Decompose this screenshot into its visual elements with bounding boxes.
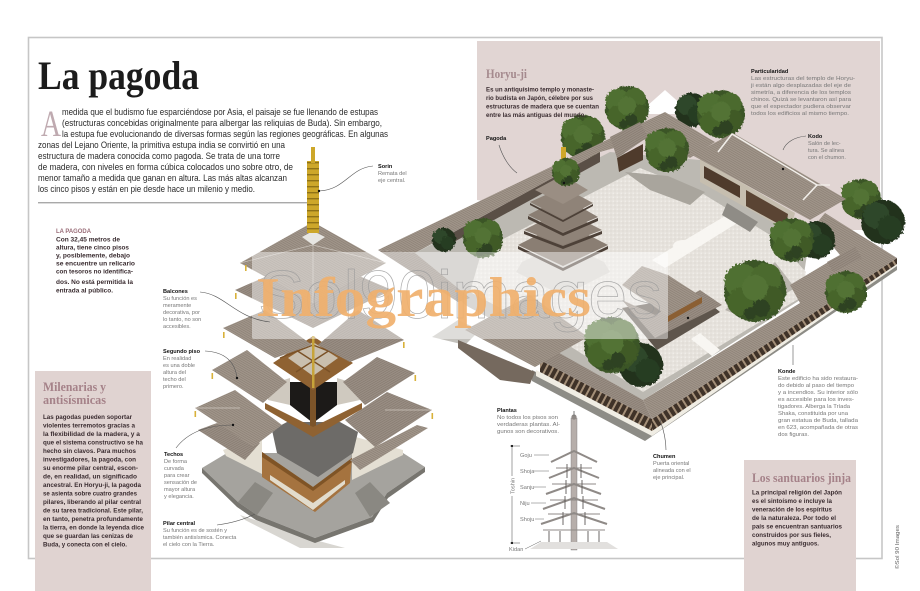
label: Segundo piso: techo del (163, 377, 186, 383)
label: Particularidad: simetría, a diferencia de los templos (751, 90, 851, 96)
text block: La pagoda: Con 32,45 metros de (56, 236, 121, 244)
label: Segundo piso: altura del (163, 370, 186, 376)
label: Konde: tigadores. Alberga la Tríada (778, 404, 851, 410)
text block: La pagoda: LA PAGODA (56, 229, 92, 235)
diagram: pagoda floors elevation (507, 411, 618, 553)
label: Balcones: lo tanto, no son (163, 317, 201, 323)
label: Kodo: Kodo (808, 134, 823, 140)
label: Pagoda (486, 136, 565, 184)
label: Particularidad: ji están algo desplazadas del eje de (750, 83, 851, 89)
panel: Milenarias y antisísmicas: Buda, y conecta con el cielo. (43, 542, 127, 548)
intro text block: (estructuras concebidas originalmente para albergar las reliquias de Buda). Sin embargo, (62, 118, 382, 128)
diagram: pagoda floors elevation: Shoja (520, 469, 535, 475)
panel: Los santuarios jinja: algunos muy antiguos. (752, 540, 819, 548)
panel: Los santuarios jinja: construidos por sus fieles, (752, 532, 831, 539)
label: Techos: curvada (164, 466, 185, 472)
label: Balcones: accesibles. (163, 324, 191, 330)
label: Balcones: decorativa, por (163, 310, 200, 316)
panel: Milenarias y antisísmicas: de, en realidad, un significado (43, 474, 137, 480)
panel: Milenarias y antisísmicas: investigadores, la pagoda, con (43, 456, 136, 464)
panel: Los santuarios jinja (744, 460, 856, 591)
label: Sorin: Remata del (378, 171, 407, 177)
watermark: Infographics (256, 267, 591, 329)
text block: La pagoda: con tesoros no identifica- (56, 268, 133, 276)
central pillar (571, 418, 577, 550)
first roof (195, 390, 432, 447)
label: Konde (687, 317, 859, 438)
label: Particularidad (750, 69, 855, 117)
white back court (638, 90, 692, 114)
label: Pilar central (163, 514, 255, 548)
panel: Milenarias y antisísmicas: violentes terremotos gracias a (43, 422, 135, 430)
courtyard paving (415, 152, 810, 400)
building: north gate (610, 122, 648, 172)
intro text block: estructura de madera conocida como pagoda. Se trata de una torre (38, 151, 280, 161)
fourth roof (235, 256, 392, 328)
panel: Horyu-ji background (477, 41, 880, 230)
panel: Milenarias y antisísmicas: ancestral. En Horyu-ji, la pagoda (43, 482, 141, 489)
diagram: pagoda floors elevation: Shoju (520, 517, 534, 523)
panel: Milenarias y antisísmicas: la flexibilidad de la madera, y a (43, 431, 141, 438)
text block: Horyu-ji: entre las más antiguas del mundo. (486, 112, 586, 119)
heading: Los santuarios jinja (752, 471, 852, 485)
label: Kodo (782, 134, 846, 170)
panel: Los santuarios jinja: es el sintoísmo e incluye la (752, 498, 832, 505)
label: Pilar central: Pilar central (163, 521, 195, 527)
panel: Milenarias y antisísmicas (35, 371, 151, 591)
text block: Horyu-ji (486, 66, 599, 119)
panel: Milenarias y antisísmicas: Las pagodas pueden soportar (43, 414, 133, 421)
building: small pagoda (516, 147, 610, 296)
panel: Milenarias y antisísmicas: su enorme pilar central, escon- (43, 465, 138, 472)
label: Techos: De forma (164, 459, 188, 465)
text block: Horyu-ji: estructuras de madera que se cuentan (486, 104, 599, 110)
eave bells (194, 265, 433, 419)
label: Particularidad: chinos. Quizá se levantaron así para (751, 97, 852, 103)
label: Konde: y a incendios. Su interior sólo (778, 390, 858, 396)
label: Plantas: No todos los pisos son (497, 415, 558, 421)
label: Konde: Konde (778, 369, 795, 375)
diagram: pagoda floors elevation: Kidan (509, 547, 523, 553)
gravel shadows (625, 172, 705, 205)
ground shadow (200, 475, 345, 548)
label: Kodo: tura. Se alinea (808, 148, 845, 154)
label: Segundo piso: primero. (163, 384, 184, 390)
intro text block: menor tamaño a medida que ganan en altura. Las más altas alcanzan (38, 173, 287, 183)
label: Segundo piso: En realidad (163, 356, 191, 362)
panel: Los santuarios jinja: país se encuentran santuarios (752, 524, 842, 530)
walkways (652, 213, 742, 268)
heading: Milenarias y (43, 379, 106, 394)
label: Techos: Techos (164, 452, 183, 458)
label: Particularidad: todos los edificios al mismo tiempo. (751, 111, 849, 117)
spire base (302, 231, 325, 245)
label: Techos: mayor altura (164, 487, 196, 493)
panel: Milenarias y antisísmicas: antisísmicas (43, 392, 106, 407)
courtyard gravel (470, 168, 806, 392)
panel: Los santuarios jinja: de la naturaleza. Por todo el (752, 515, 836, 522)
building: Chumon gate (432, 295, 588, 384)
intro text block (38, 104, 388, 194)
label: Segundo piso (163, 349, 238, 390)
plaster side walls (223, 436, 262, 474)
building: Kodo (692, 133, 846, 232)
label: Konde: en 623, acompañada de otras (778, 425, 858, 431)
panel: Milenarias y antisísmicas: la tierra, en donde la leyenda dice (43, 524, 144, 532)
label: Sorin: eje central. (378, 178, 406, 184)
text block: Horyu-ji: rio budista en Japón, célebre por sus (486, 95, 593, 102)
illustration: large pagoda cross-section (194, 147, 433, 548)
label: Plantas: verdaderas plantas. Al- (497, 422, 560, 428)
intro text block: de madera, con niveles en forma cúbica colocados uno sobre otro, de (38, 162, 293, 172)
label: Plantas: gunos son decorativos. (497, 429, 559, 435)
cloister roof: south-west arm (540, 345, 652, 419)
back trees (561, 86, 905, 244)
label: Plantas: Plantas (497, 408, 517, 414)
label: Pilar central: también antisísmica. Conecta (163, 535, 237, 541)
label: Chumen: eje principal. (653, 475, 685, 481)
label: Plantas (497, 408, 560, 435)
building: east gate (827, 247, 862, 272)
intro text block: los cinco pisos y están en pie desde hace un milenio y medio. (38, 184, 255, 194)
label: Particularidad: que el espectador pudiera observar (751, 104, 851, 110)
label: Konde: gran estatua de Buda, tallada (778, 418, 859, 424)
text block: La pagoda: entrada al público. (56, 288, 113, 294)
text block: Horyu-ji: Es un antiquísimo templo y monaste- (486, 86, 594, 94)
panel: Milenarias y antisísmicas: que el sistema constructivo se ha (43, 440, 143, 446)
label: Kodo: con el chumon. (808, 155, 846, 161)
text block: La pagoda: dos. No está permitida la (56, 279, 133, 286)
intro text block: la estupa fue evolucionando de diversas formas según las regiones geográficas. En algunas (62, 129, 388, 139)
label: Balcones: Balcones (163, 289, 188, 295)
panel: Los santuarios jinja: veneración de los espíritus (752, 506, 832, 514)
spire (307, 147, 319, 233)
diagram: pagoda floors elevation: Niju (520, 501, 530, 507)
covered walkway posts (652, 258, 897, 431)
cloister roof: east arm (643, 213, 897, 419)
floors (541, 451, 607, 530)
label: Kodo: Salón de lec- (808, 141, 841, 147)
panel: Milenarias y antisísmicas: que se guardan las cenizas de (43, 533, 133, 540)
panel: Milenarias y antisísmicas: se asienta sobre cuatro grandes (43, 490, 137, 498)
third roof (223, 310, 312, 358)
height bracket (510, 446, 520, 543)
panel: Milenarias y antisísmicas: en tanto, penetra profundamente (43, 516, 144, 523)
label: Konde: es accesible para los inves- (778, 397, 854, 403)
title: La pagoda (38, 53, 199, 98)
label: Chumen (653, 420, 691, 481)
intro text block: zonas del Lejano Oriente, la primitiva estupa india se convirtió en una (38, 140, 286, 150)
label: Sorin: Sorin (378, 164, 393, 170)
label: Chumen: Chumen (653, 454, 676, 460)
upper timber frame (273, 336, 353, 390)
skirt roofs (198, 423, 260, 460)
label: Konde: do debido al paso del tiempo (778, 383, 854, 389)
label: Balcones: Su función es (163, 296, 197, 302)
second roof (212, 350, 415, 405)
text block: La pagoda: se encuentre un relicario (56, 260, 135, 268)
label: Sorin (318, 164, 407, 192)
label: Balcones: meramente (163, 303, 191, 309)
cloister roof: west stub (378, 250, 470, 302)
label: Chumen: Puerta oriental (653, 461, 689, 467)
mid-floor interior (290, 382, 337, 423)
diagram: pagoda floors elevation: Sanju (520, 485, 534, 491)
panel: Milenarias y antisísmicas: de su tarea tradicional. Este pilar, (43, 508, 143, 514)
watermark: Sol90images (258, 257, 662, 333)
ground floor timber frame (262, 452, 352, 512)
illustration: Horyu-ji temple complex (378, 86, 905, 441)
text block: La pagoda: altura, tiene cinco pisos (56, 244, 129, 252)
text block: La pagoda: y, posiblemente, debajo (56, 252, 130, 260)
copyright: ©Sol 90 Images (894, 525, 901, 569)
stairs (238, 482, 273, 515)
front trees (432, 128, 867, 387)
label: Segundo piso: Segundo piso (163, 349, 201, 355)
label: Konde: dos figuras. (778, 432, 809, 438)
ground floor interior (272, 422, 358, 477)
label: Pilar central: el cielo con la Tierra. (163, 542, 215, 548)
label: Techos: y elegancia. (164, 494, 194, 500)
panel: Milenarias y antisísmicas: pilares, liberando al pilar central (43, 499, 141, 506)
label: Particularidad: Particularidad (751, 69, 789, 75)
label: Particularidad: Las estructuras del templo de Horyu- (751, 76, 855, 82)
label: Balcones (163, 289, 270, 330)
floor names: Goju (520, 453, 532, 459)
panel: Los santuarios jinja: La principal religión del Japón (752, 490, 842, 496)
label: Techos (164, 424, 234, 500)
label: Segundo piso: es una doble (163, 363, 195, 369)
diagram: pagoda floors elevation: Toshin (510, 478, 516, 494)
label: Techos: sensación de (164, 480, 197, 486)
label: Techos: para crear (164, 473, 190, 479)
label: Konde: Este edificio ha sido restaura- (778, 376, 858, 382)
stone base (202, 453, 425, 538)
panel: Milenarias y antisísmicas: hecho sin clavos. Para muchos (43, 448, 136, 455)
top roof (240, 222, 386, 303)
cloister roof: north-west arm (378, 112, 715, 253)
text block: Horyu-ji: Horyu-ji (486, 66, 527, 81)
label: Pilar central: Su función es de sostén y (163, 528, 227, 534)
intro text block: medida que el budismo fue esparciéndose por Asia, el paisaje se fue llenando de estupas (62, 107, 378, 117)
label: Chumen: alineada con el (653, 468, 691, 474)
label: Pagoda: Pagoda (486, 136, 507, 142)
text block: La pagoda (56, 229, 135, 294)
outer base shadow (532, 262, 897, 441)
label: Konde: Shaka, constituida por una (778, 411, 849, 417)
drop cap: A (41, 104, 61, 145)
building: Kondo (622, 266, 722, 350)
